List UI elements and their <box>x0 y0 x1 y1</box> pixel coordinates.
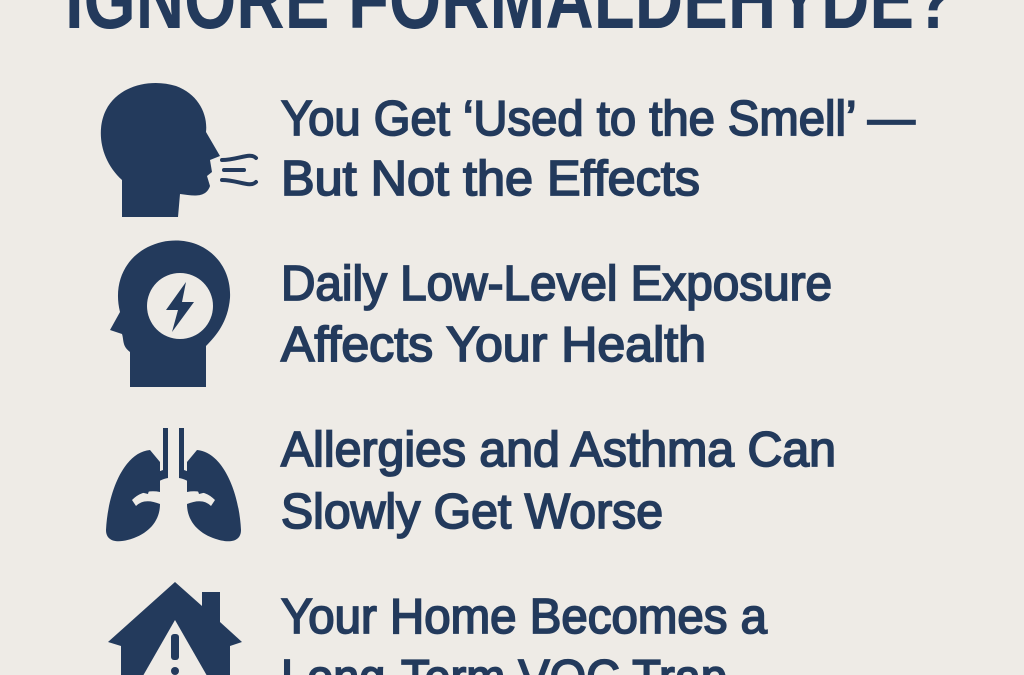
text: item 2 <box>281 257 832 372</box>
text: item 1: You Get ‘Used to the Smell’ — <box>281 92 915 146</box>
text: item 1 <box>281 92 915 206</box>
item 4 <box>108 582 768 675</box>
text: item 4: Your Home Becomes a <box>281 590 768 644</box>
item 2 <box>110 241 832 387</box>
text: item 3: Allergies and Asthma Can <box>281 423 836 477</box>
text: item 4 <box>281 590 768 675</box>
icon: head breathing <box>101 83 256 217</box>
text: item 3 <box>281 423 836 539</box>
item 1 <box>101 83 915 217</box>
item 3 <box>106 423 836 541</box>
icon: head with bolt <box>110 241 230 387</box>
icon: lungs <box>106 428 241 541</box>
text: item 1: But Not the Effects <box>281 152 700 206</box>
icon: house with warning <box>108 582 242 675</box>
text: item 2: Daily Low-Level Exposure <box>281 257 832 311</box>
text: item 2: Affects Your Health <box>281 318 706 372</box>
text: item 3: Slowly Get Worse <box>281 485 663 539</box>
